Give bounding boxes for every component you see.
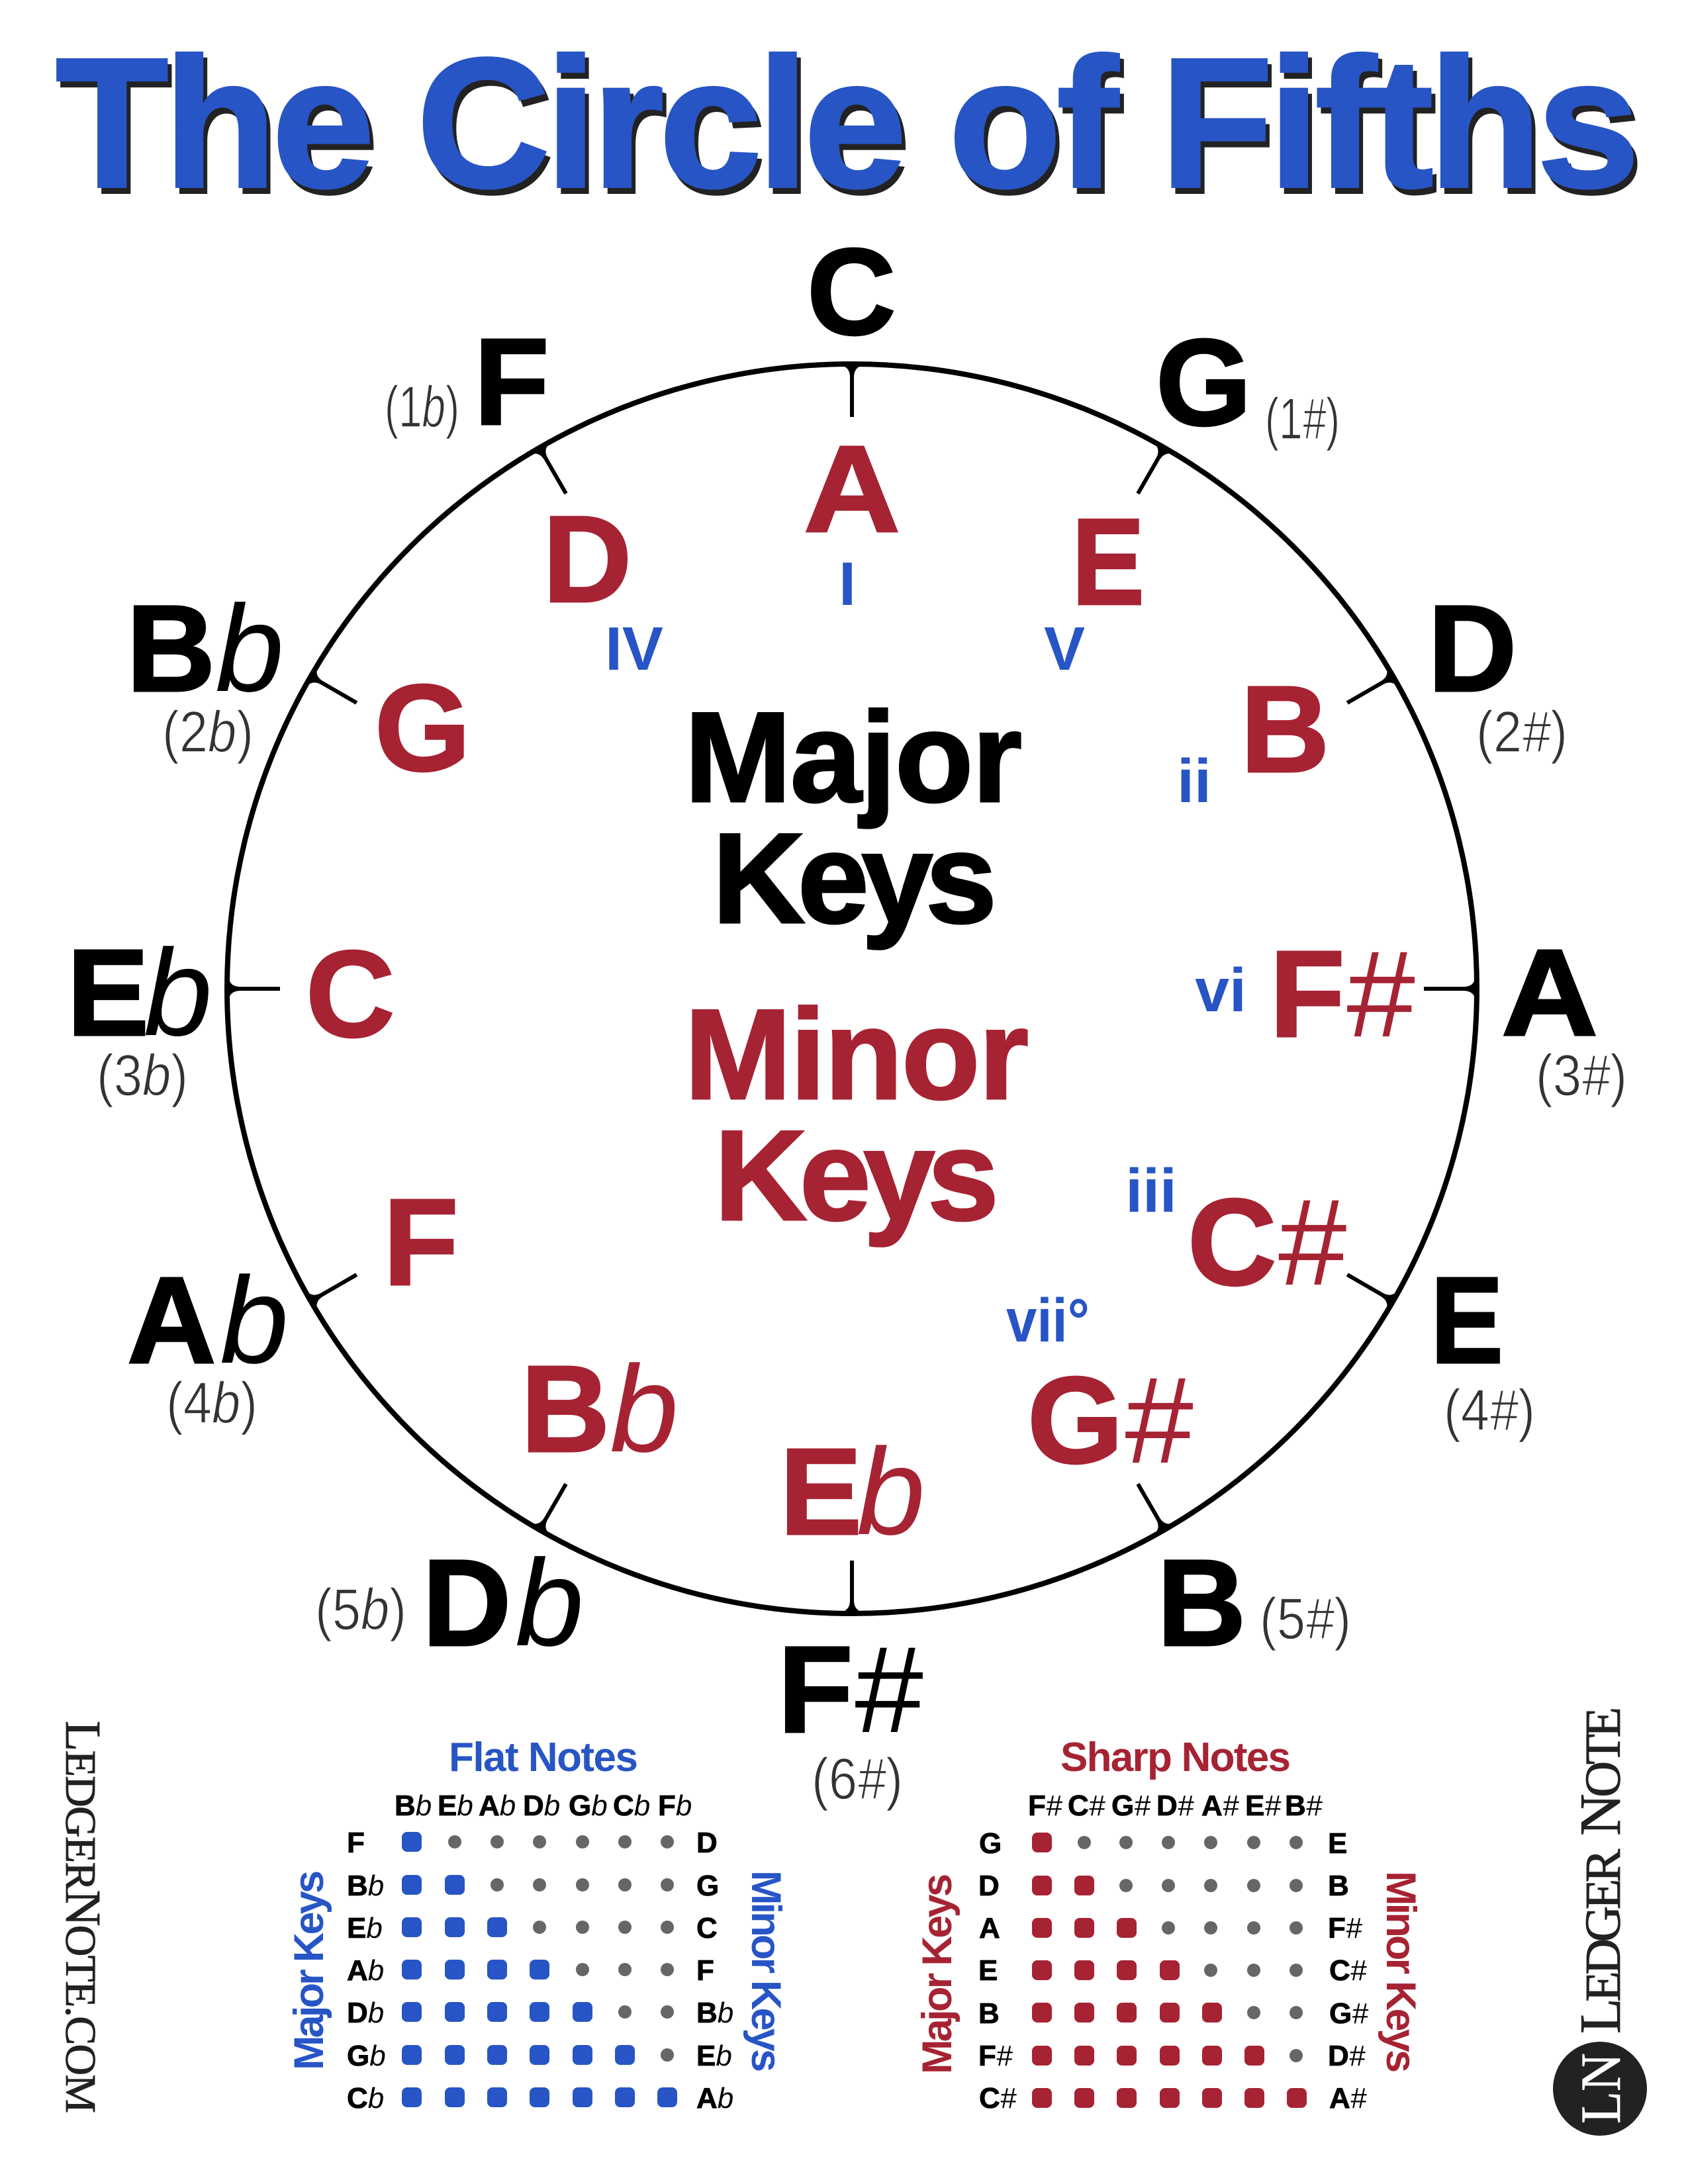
flat major key row labels: Cb bbox=[347, 2082, 384, 2115]
scale degree numerals: vii° bbox=[1006, 1286, 1090, 1355]
flat side label: minor keys: Minor Keys bbox=[743, 1870, 789, 2072]
key signature counts: (5#) bbox=[1260, 1586, 1351, 1651]
major key labels around the circle: D bbox=[1428, 580, 1517, 717]
center heading: minor keys: Keys bbox=[714, 1104, 999, 1248]
key signature counts: (2b) bbox=[162, 699, 254, 764]
icon: LN logo badge bbox=[1553, 2042, 1647, 2136]
minor key labels inside the circle: C# bbox=[1188, 1174, 1346, 1311]
major key labels around the circle: Db bbox=[422, 1535, 584, 1672]
flat major key row labels: Bb bbox=[347, 1870, 384, 1902]
major key labels around the circle: Ab bbox=[127, 1252, 289, 1389]
flat column headers: Eb bbox=[438, 1790, 473, 1822]
flat minor key row labels: Eb bbox=[696, 2040, 732, 2072]
flat column headers: Ab bbox=[479, 1790, 516, 1822]
sharp column headers: B# bbox=[1285, 1790, 1323, 1822]
minor key labels inside the circle: F bbox=[383, 1174, 459, 1311]
key signature counts: (4b) bbox=[166, 1370, 258, 1435]
flat column headers: Gb bbox=[569, 1790, 608, 1822]
flat minor key row labels: G bbox=[696, 1870, 719, 1902]
center heading: minor keys bbox=[684, 983, 1029, 1248]
panel: flat notes chart bbox=[286, 1735, 789, 2115]
flat major key row labels: Eb bbox=[347, 1912, 383, 1944]
key signature counts bbox=[97, 374, 1627, 1811]
minor key labels inside the circle: G bbox=[375, 660, 471, 797]
flat minor key row labels: C bbox=[696, 1912, 718, 1944]
sharp major key row labels: B bbox=[978, 1997, 1000, 2030]
minor key labels inside the circle: F# bbox=[1270, 926, 1415, 1063]
scale degree numerals: ii bbox=[1177, 747, 1211, 815]
minor key labels inside the circle: C bbox=[306, 926, 395, 1063]
sharp minor key row labels bbox=[1328, 1827, 1368, 2115]
flat column headers bbox=[395, 1790, 692, 1822]
sharp minor key row labels: G# bbox=[1329, 1997, 1368, 2030]
major key labels around the circle: F# bbox=[778, 1621, 923, 1758]
sharp minor key row labels: D# bbox=[1328, 2040, 1366, 2072]
sharp minor key row labels: C# bbox=[1329, 1954, 1367, 1987]
flat minor key row labels: F bbox=[696, 1954, 714, 1987]
scale degree numerals: I bbox=[839, 549, 856, 618]
center heading: major keys: Major bbox=[684, 686, 1022, 829]
key signature counts: (5b) bbox=[315, 1576, 406, 1642]
circle with tick marks bbox=[227, 364, 1477, 1614]
minor key labels inside the circle: B bbox=[1241, 661, 1329, 798]
scale degree numerals: vi bbox=[1195, 956, 1246, 1024]
flat column headers: Db bbox=[523, 1790, 560, 1822]
minor key labels inside the circle: D bbox=[543, 491, 632, 628]
minor key labels inside the circle: Eb bbox=[780, 1424, 925, 1561]
flat minor key row labels: Ab bbox=[696, 2082, 733, 2115]
major key labels around the circle bbox=[67, 224, 1598, 1758]
sharp major key row labels: F# bbox=[978, 2040, 1013, 2072]
minor key labels inside the circle: G# bbox=[1027, 1352, 1194, 1489]
flat dot matrix bbox=[402, 1832, 677, 2107]
scale degree numerals: iii bbox=[1125, 1156, 1177, 1225]
flat side label: major keys: Major Keys bbox=[286, 1870, 332, 2070]
major key labels around the circle: C bbox=[807, 224, 896, 361]
minor key labels inside the circle: E bbox=[1072, 494, 1145, 631]
scale degree numerals: V bbox=[1044, 614, 1085, 683]
major key labels around the circle: G bbox=[1156, 314, 1252, 451]
title: The Circle of Fifths bbox=[56, 20, 1640, 226]
flat minor key row labels: D bbox=[696, 1827, 718, 1859]
flat minor key row labels bbox=[696, 1827, 733, 2115]
key signature counts: (1#) bbox=[1265, 386, 1340, 451]
flat minor key row labels: Bb bbox=[696, 1997, 733, 2029]
sharp dot matrix bbox=[1032, 1833, 1307, 2108]
key signature counts: (6#) bbox=[812, 1746, 903, 1811]
sharp minor key row labels: F# bbox=[1328, 1912, 1362, 1944]
sharp minor key row labels: B bbox=[1328, 1870, 1349, 1902]
major key labels around the circle: B bbox=[1157, 1535, 1246, 1672]
sharp side label: major keys: Major Keys bbox=[914, 1874, 961, 2074]
flat notes heading: Flat Notes bbox=[449, 1735, 638, 1780]
flat major key row labels: F bbox=[347, 1827, 365, 1859]
flat major key row labels: Gb bbox=[347, 2040, 386, 2072]
major key labels around the circle: E bbox=[1430, 1252, 1503, 1389]
flat major key row labels bbox=[347, 1827, 386, 2115]
flat column headers: Fb bbox=[658, 1790, 692, 1822]
website url vertical text: L EDGER N OTE.COM bbox=[55, 1721, 111, 2113]
flat major key row labels: Ab bbox=[347, 1954, 384, 1987]
brand wordmark vertical text: LEDGER NOTE bbox=[1569, 1708, 1633, 2034]
sharp column headers: D# bbox=[1156, 1790, 1194, 1822]
minor key labels inside the circle: A bbox=[804, 421, 900, 558]
sharp major key row labels: E bbox=[978, 1954, 998, 1987]
scale degree numerals: IV bbox=[605, 614, 663, 683]
major key labels around the circle: A bbox=[1501, 925, 1598, 1062]
center heading: major keys bbox=[684, 686, 1022, 950]
key signature counts: (2#) bbox=[1476, 699, 1568, 764]
sharp column headers: C# bbox=[1068, 1790, 1105, 1822]
key signature counts: (3b) bbox=[97, 1042, 188, 1108]
flat column headers: Bb bbox=[395, 1790, 432, 1822]
sharp major key row labels: G bbox=[979, 1827, 1002, 1860]
flat column headers: Cb bbox=[613, 1790, 650, 1822]
sharp column headers: F# bbox=[1028, 1790, 1062, 1822]
key signature counts: (1b) bbox=[385, 374, 459, 439]
sharp major key row labels bbox=[978, 1827, 1017, 2115]
major key labels around the circle: Bb bbox=[126, 580, 284, 717]
sharp minor key row labels: E bbox=[1328, 1827, 1347, 1860]
sharp notes heading: Sharp Notes bbox=[1060, 1735, 1291, 1780]
center heading: minor keys: Minor bbox=[684, 983, 1029, 1126]
major key labels around the circle: F bbox=[474, 314, 549, 451]
sharp column headers: E# bbox=[1245, 1790, 1281, 1822]
sharp column headers: A# bbox=[1201, 1790, 1239, 1822]
scale degree numerals bbox=[605, 549, 1246, 1355]
major key labels around the circle: Eb bbox=[67, 925, 212, 1062]
minor key labels inside the circle bbox=[306, 421, 1415, 1561]
key signature counts: (4#) bbox=[1444, 1377, 1535, 1443]
sharp major key row labels: C# bbox=[979, 2082, 1017, 2115]
sharp major key row labels: A bbox=[979, 1912, 1000, 1944]
sharp side label: minor keys: Minor Keys bbox=[1378, 1871, 1424, 2073]
key signature counts: (3#) bbox=[1536, 1042, 1627, 1108]
sharp column headers: G# bbox=[1111, 1790, 1150, 1822]
sharp minor key row labels: A# bbox=[1329, 2082, 1367, 2115]
center heading: major keys: Keys bbox=[712, 807, 997, 950]
flat major key row labels: Db bbox=[347, 1997, 384, 2029]
sharp major key row labels: D bbox=[978, 1870, 1000, 1902]
minor key labels inside the circle: Bb bbox=[521, 1341, 679, 1478]
sharp column headers bbox=[1028, 1790, 1323, 1822]
panel: sharp notes chart bbox=[914, 1735, 1424, 2115]
icon: LN logo badge: LN bbox=[1569, 2053, 1632, 2124]
